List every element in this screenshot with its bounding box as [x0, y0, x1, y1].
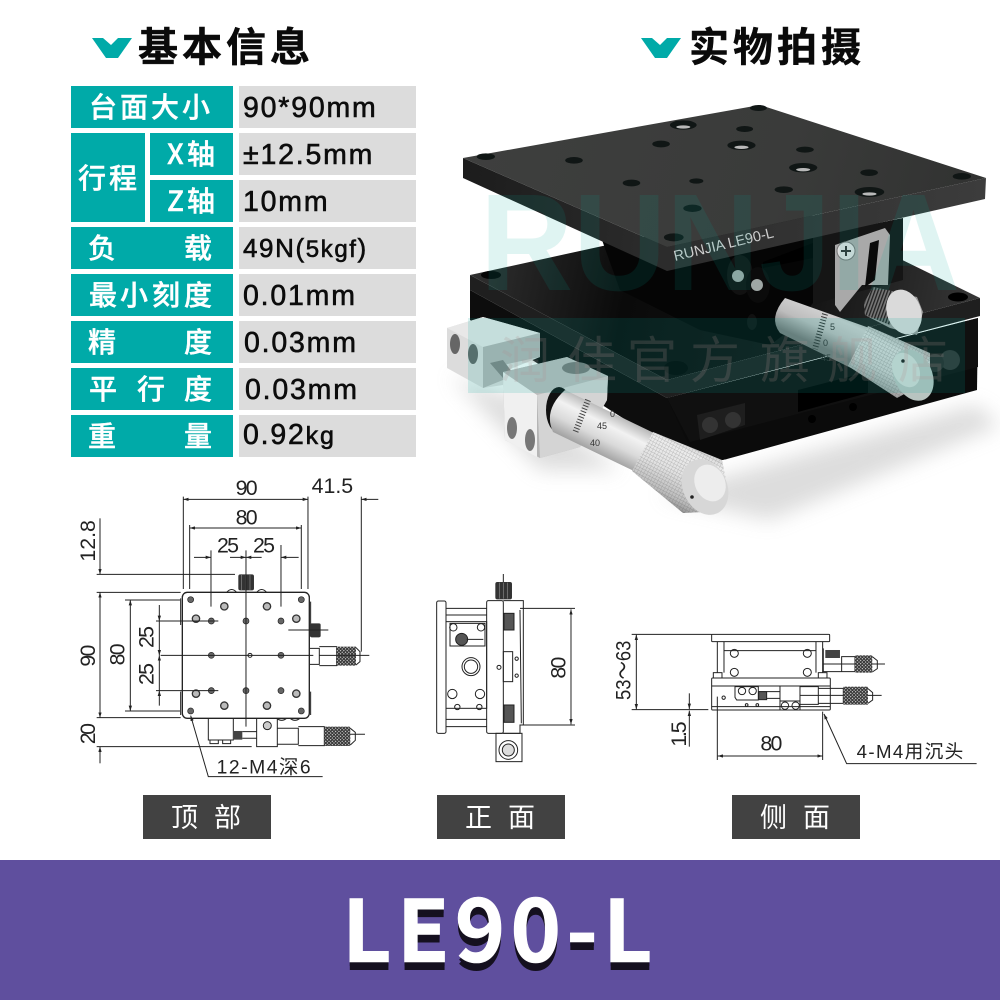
dimension labels: 90: [236, 476, 258, 500]
heading text: 基本信息: [138, 26, 314, 70]
upper micrometer: [823, 648, 885, 673]
row: parallelism: 0.03mm: [245, 374, 359, 406]
right micrometer scale numbers: 5: [830, 322, 835, 332]
row: table size: [71, 86, 416, 128]
left micrometer scale numbers: 40: [590, 438, 600, 448]
footer band with model name: [0, 860, 1000, 1000]
row: table size: 90*90mm: [243, 92, 378, 124]
row: parallelism: [71, 368, 416, 410]
watermark shop name: 润佳官方旗舰店: [500, 321, 948, 393]
watermark brand word: RUNJIA: [480, 166, 960, 320]
right micrometer scale numbers: [821, 322, 835, 363]
stage elevation: [712, 634, 830, 710]
left micrometer scale numbers: 45: [597, 421, 607, 431]
row group: travel: X轴: [167, 133, 215, 173]
specification table: [71, 86, 416, 457]
engraved model label: RUNJIA LE90-L: [672, 225, 775, 265]
caption: side view: [732, 795, 860, 839]
stage outline: [181, 589, 311, 720]
dimension lines: [97, 497, 378, 777]
heading: product photo: [641, 26, 865, 70]
dimension labels: [76, 474, 353, 778]
row group: travel: ±12.5mm: [243, 139, 374, 171]
top knob: [495, 582, 512, 599]
right knob: [310, 623, 321, 637]
ground shadow: [450, 375, 1000, 520]
top plate: [463, 105, 986, 271]
watermark: brand and shop name: [468, 166, 965, 393]
right micrometer: [775, 298, 942, 408]
row group: travel: 10mm: [243, 186, 329, 218]
dimension label: 80: [546, 657, 570, 679]
x micrometer: [310, 647, 360, 666]
centre column: [602, 218, 903, 345]
dimension labels: 25: [134, 663, 158, 685]
icon: teal chevron: [92, 38, 132, 58]
row: minimum scale: [71, 274, 416, 316]
row: accuracy: 0.03mm: [244, 327, 358, 359]
left micrometer scale numbers: 0: [610, 409, 615, 419]
model name: LE90-L: [342, 862, 658, 987]
height dimension 80: [520, 608, 575, 725]
heading: basic information: [92, 26, 314, 70]
dimension labels: 80: [760, 732, 782, 756]
lower micrometer: [800, 687, 882, 705]
drawing: side view: [612, 634, 977, 764]
row: minimum scale: 0.01mm: [243, 280, 357, 312]
heading text: 实物拍摄: [689, 26, 865, 70]
dimension labels: 12-M4深6: [217, 756, 311, 778]
dimension labels: 4-M4用沉头: [857, 741, 963, 762]
icon: teal chevron: [641, 38, 681, 58]
lower block faces: [470, 290, 978, 465]
mounting holes: [188, 597, 304, 714]
row: load: 49N(5kgf): [243, 233, 368, 263]
left micrometer scale numbers: [590, 409, 615, 448]
dimension labels: 12.8: [76, 520, 100, 562]
z micrometer and block: [208, 718, 355, 747]
dimension labels: 25: [134, 626, 158, 648]
caption: front view: 正面: [465, 796, 535, 835]
caption: top view: [143, 795, 271, 839]
dimension labels: 53～63: [612, 641, 636, 700]
row group: travel: [71, 133, 416, 222]
dimension labels: [612, 641, 963, 762]
drawing: front view: [437, 574, 575, 762]
product photo: XZ stage: [447, 105, 1000, 523]
dimension labels: 25: [217, 533, 239, 557]
caption: side view: 侧面: [760, 796, 830, 835]
dimension lines: [632, 634, 977, 764]
row: accuracy: [71, 321, 416, 363]
right micrometer scale numbers: 45: [821, 353, 831, 363]
right micrometer scale numbers: 0: [823, 338, 828, 348]
row: accuracy: 精度: [88, 321, 212, 361]
row: load: [71, 227, 416, 269]
dimension labels: 80: [236, 505, 258, 529]
silver lock bracket and knob: [835, 228, 928, 339]
caption: top view: 顶部: [171, 796, 241, 835]
row: minimum scale: 最小刻度: [89, 274, 212, 314]
drawing: top view: [76, 474, 378, 778]
dimension labels: 25: [253, 533, 275, 557]
row: parallelism: 平行度: [89, 368, 212, 408]
caption: front view: [437, 795, 565, 839]
dimension labels: 80: [105, 643, 129, 665]
row group: travel: 行程: [78, 157, 137, 197]
row: weight: 重量: [88, 415, 212, 455]
stage side elevation: [437, 574, 523, 762]
row: table size: 台面大小: [89, 86, 210, 126]
row group: travel: Z轴: [167, 180, 215, 220]
dimension labels: 20: [76, 723, 100, 744]
dimension labels: 1.5: [667, 721, 691, 747]
dimension labels: 41.5: [312, 474, 353, 498]
row: weight: 0.92kg: [243, 419, 336, 451]
watermark strip: [468, 318, 965, 393]
top knob: [238, 574, 254, 590]
dimension labels: 90: [76, 645, 100, 667]
row: load: 负载: [88, 227, 212, 267]
lower plate: [470, 205, 980, 398]
left micrometer and blocks: [447, 317, 737, 523]
row: weight: [71, 415, 416, 457]
